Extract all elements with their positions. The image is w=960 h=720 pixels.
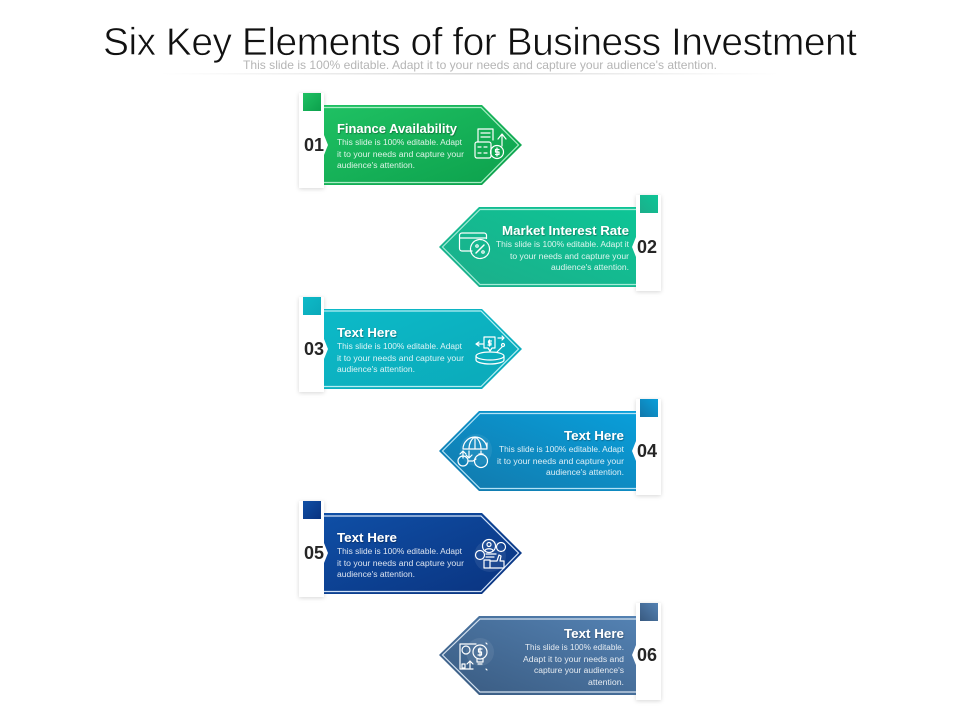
arrow banner 06: [439, 616, 636, 695]
colour square 03: [303, 297, 321, 315]
body 02: This slide is 100% editable. Adapt it: [496, 240, 630, 249]
panel: 03 Text Here: [299, 297, 522, 392]
icon: umbrella, dollar and money bag: [458, 434, 492, 468]
body 03: [337, 342, 464, 374]
body 06: [523, 643, 624, 687]
number tab 06: [632, 603, 661, 700]
number 01: 01: [304, 135, 324, 155]
body 03: audience's attention.: [337, 365, 415, 374]
colour square 04: [640, 399, 658, 417]
heading 05: Text Here: [337, 530, 397, 545]
colour square 05: [303, 501, 321, 519]
icon: people and thumbs up: [474, 540, 506, 572]
body 05: it to your needs and capture your: [337, 559, 464, 568]
body 02: [496, 240, 630, 272]
arrow banner 05: [324, 513, 522, 594]
body 04: it to your needs and capture your: [497, 457, 624, 466]
body 01: This slide is 100% editable. Adapt: [337, 138, 463, 147]
body 03: it to your needs and capture your: [337, 354, 464, 363]
body 04: audience's attention.: [546, 468, 624, 477]
number 04: 04: [637, 441, 657, 461]
colour square 02: [640, 195, 658, 213]
arrow banner 01: [324, 105, 522, 185]
body 06: This slide is 100% editable.: [525, 643, 624, 652]
body 02: audience's attention.: [551, 263, 629, 272]
body 05: This slide is 100% editable. Adapt: [337, 547, 463, 556]
arrow banner 04: [439, 411, 636, 491]
body 06: attention.: [588, 678, 624, 687]
panel: 06 Text Here: [439, 603, 661, 700]
heading 02: Market Interest Rate: [502, 223, 629, 238]
number tab 01: [299, 93, 328, 188]
colour square 01: [303, 93, 321, 111]
heading 03: Text Here: [337, 325, 397, 340]
number tab 04: [632, 399, 661, 495]
body 04: This slide is 100% editable. Adapt: [499, 445, 625, 454]
panel: 01 Finance Availability: [299, 93, 522, 188]
number tab 05: [299, 501, 328, 597]
icon: card and percent badge: [460, 233, 490, 258]
number tab 02: [632, 195, 661, 291]
body 02: to your needs and capture your: [510, 252, 629, 261]
number 02: 02: [637, 237, 657, 257]
body 05: [337, 547, 464, 579]
icon: coin stack and speech bubble: [476, 336, 504, 364]
arrow banner 03: [324, 309, 522, 389]
panel: 05 Text Here: [299, 501, 522, 597]
body 05: audience's attention.: [337, 570, 415, 579]
number 06: 06: [637, 645, 657, 665]
panel: 02 Market Interest Rate: [439, 195, 661, 291]
subtitle: This slide is 100% editable. Adapt it to your needs and capture your audience's attention.: [243, 58, 717, 72]
body 06: capture your audience's: [534, 666, 624, 675]
colour square 06: [640, 603, 658, 621]
body 06: Adapt it to your needs and: [523, 655, 624, 664]
number tab 03: [299, 297, 328, 392]
heading 06: Text Here: [564, 626, 624, 641]
body 01: [337, 138, 464, 170]
heading 01: Finance Availability: [337, 121, 458, 136]
body 01: it to your needs and capture your: [337, 150, 464, 159]
arrow banner 02: [439, 207, 636, 287]
panel: 04 Text Here: [439, 399, 661, 495]
body 04: [497, 445, 625, 477]
body 01: audience's attention.: [337, 161, 415, 170]
icon: calculator and dollar: [475, 129, 506, 158]
number 05: 05: [304, 543, 324, 563]
number 03: 03: [304, 339, 324, 359]
title: Six Key Elements of for Business Investment: [103, 21, 857, 64]
body 03: This slide is 100% editable. Adapt: [337, 342, 463, 351]
heading 04: Text Here: [564, 428, 624, 443]
icon: document and dollar bulb: [460, 638, 494, 670]
